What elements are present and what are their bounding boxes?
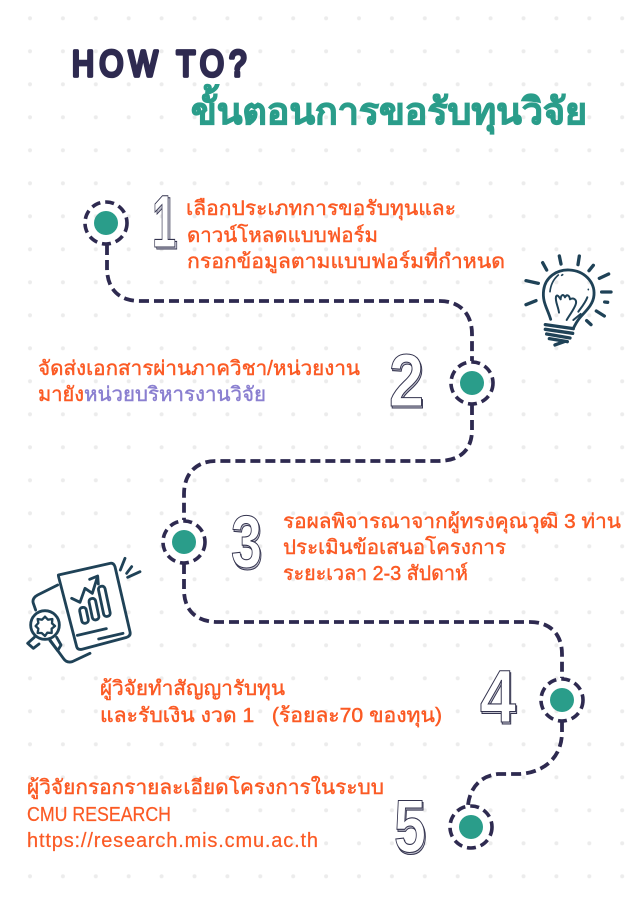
step 4 text: ผู้วิจัยทำสัญญารับทุน [100, 678, 285, 701]
node 5 [450, 806, 492, 848]
number 4: 4 [480, 655, 516, 738]
step 1 text: เลือกประเภทการขอรับทุนและ [186, 198, 456, 221]
step 3 text: ประเมินข้อเสนอโครงการ [283, 536, 506, 559]
step 3 text [283, 511, 621, 585]
step 2 text: หน่วยบริหารงานวิจัย [84, 384, 266, 406]
step 2 text: มายัง [38, 384, 84, 406]
node 3 [163, 521, 205, 563]
subtitle: ขั้นตอนการขอรับทุนวิจัย [191, 84, 587, 135]
number 5: 5 [394, 785, 426, 868]
step 4 text: และรับเงิน งวด 1 (ร้อยละ70 ของทุน) [100, 705, 442, 728]
step 1 text: กรอกข้อมูลตามแบบฟอร์มที่กำหนด [187, 247, 505, 274]
number 3: 3 [231, 500, 262, 583]
number 1 [152, 180, 178, 265]
number 2: 2 [390, 341, 425, 424]
node 2 [451, 362, 493, 404]
number 3: 3 [232, 502, 263, 585]
title: HOW TO?: HOW TO? [72, 45, 246, 85]
step 4 text [100, 678, 442, 728]
step 2 text: จัดส่งเอกสารผ่านภาควิชา/หน่วยงาน [38, 358, 360, 380]
step 5 text [27, 776, 384, 852]
number 2: 2 [389, 339, 424, 422]
node 4 [541, 679, 583, 721]
step 1 text: ดาวน์โหลดแบบฟอร์ม [187, 224, 378, 247]
number 5: 5 [395, 787, 427, 870]
dashed winding path [107, 245, 562, 805]
node 1 [85, 202, 127, 244]
number 1: 1 [154, 182, 178, 265]
step 5 text: ผู้วิจัยกรอกรายละเอียดโครงการในระบบ [27, 776, 384, 800]
step 5 text: CMU RESEARCH [27, 804, 171, 826]
step 1 text [186, 198, 505, 274]
icon: report document with medal [28, 558, 140, 662]
step 3 text: รอผลพิจารณาจากผู้ทรงคุณวุฒิ 3 ท่าน [283, 511, 621, 534]
number 4: 4 [481, 657, 517, 740]
step 2 text [38, 358, 360, 406]
number 1: 1 [152, 180, 176, 263]
step 3 text: ระยะเวลา 2-3 สัปดาห์ [283, 562, 468, 585]
icon: light bulb [526, 256, 611, 345]
step 5 text: https://research.mis.cmu.ac.th [27, 830, 318, 852]
